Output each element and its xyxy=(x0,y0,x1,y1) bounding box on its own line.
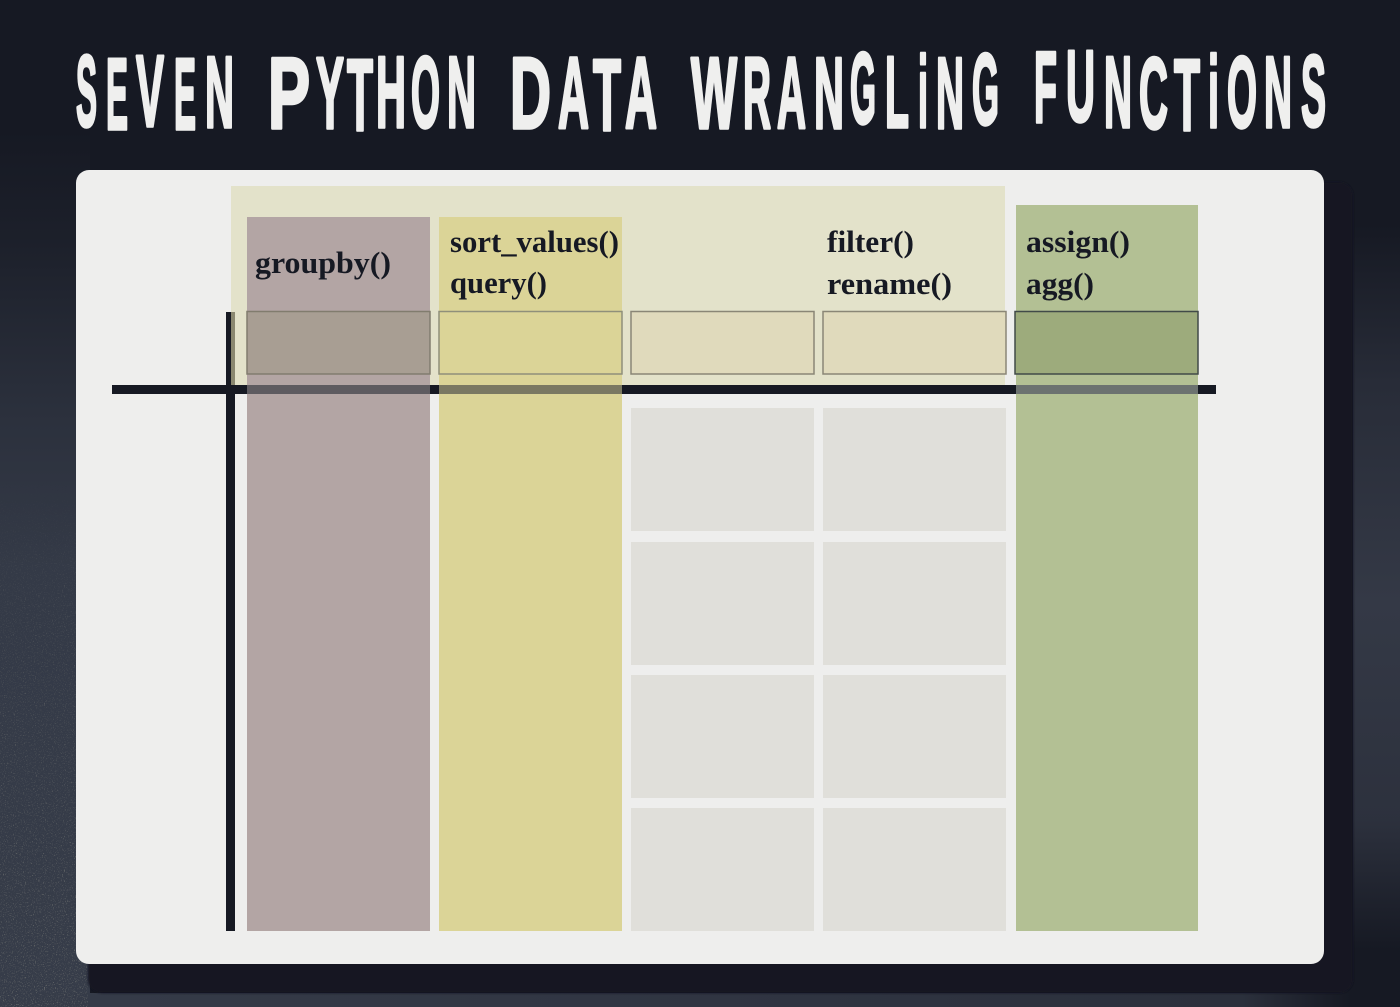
title: U xyxy=(1066,31,1095,143)
column: filter and rename: filter() xyxy=(827,224,914,259)
title: N xyxy=(205,37,234,149)
title: R xyxy=(743,38,771,150)
title: T xyxy=(1174,40,1200,152)
title: E xyxy=(174,39,196,151)
column: sort_values and query: query() xyxy=(450,265,547,300)
title: A xyxy=(777,38,806,150)
title: N xyxy=(814,38,844,150)
title: T xyxy=(347,40,373,152)
white panel xyxy=(76,170,1324,964)
title: O xyxy=(411,37,440,149)
title: Y xyxy=(316,38,344,150)
title: L xyxy=(885,37,909,149)
dark textured background xyxy=(0,245,1400,1007)
column: sort_values and query xyxy=(439,217,622,931)
title: P xyxy=(268,38,310,150)
infographic canvas: S xyxy=(1301,36,1326,148)
title: N xyxy=(1264,37,1292,149)
title: O xyxy=(1227,37,1257,149)
title: V xyxy=(136,36,164,148)
title: A xyxy=(558,38,589,150)
column: filter and rename xyxy=(823,224,1006,374)
title: T xyxy=(593,40,621,152)
title: F xyxy=(1034,32,1057,144)
column: groupby: groupby() xyxy=(255,245,391,280)
title: G xyxy=(972,34,999,146)
column: groupby xyxy=(247,217,430,931)
title: W xyxy=(691,38,737,150)
title: A xyxy=(625,38,657,150)
column: filter and rename: rename() xyxy=(827,266,952,301)
header cell: third column xyxy=(631,312,814,374)
column: assign and agg xyxy=(1015,205,1198,931)
table axes xyxy=(112,312,1216,931)
panel shadow xyxy=(88,182,1353,993)
title: D xyxy=(510,38,551,150)
title: C xyxy=(1139,38,1168,150)
title: S xyxy=(76,36,97,148)
title: N xyxy=(447,37,476,149)
title: i xyxy=(918,37,928,149)
title: G xyxy=(850,33,876,145)
title: H xyxy=(376,37,406,149)
title: E xyxy=(106,39,128,151)
column: sort_values and query: sort_values() xyxy=(450,224,619,259)
grey data cells xyxy=(631,408,1006,931)
title: i xyxy=(1208,37,1219,149)
header highlight band xyxy=(231,186,1005,385)
title: N xyxy=(936,38,964,150)
column: assign and agg: assign() xyxy=(1026,224,1130,259)
title: N xyxy=(1104,37,1132,149)
column: assign and agg: agg() xyxy=(1026,266,1094,301)
